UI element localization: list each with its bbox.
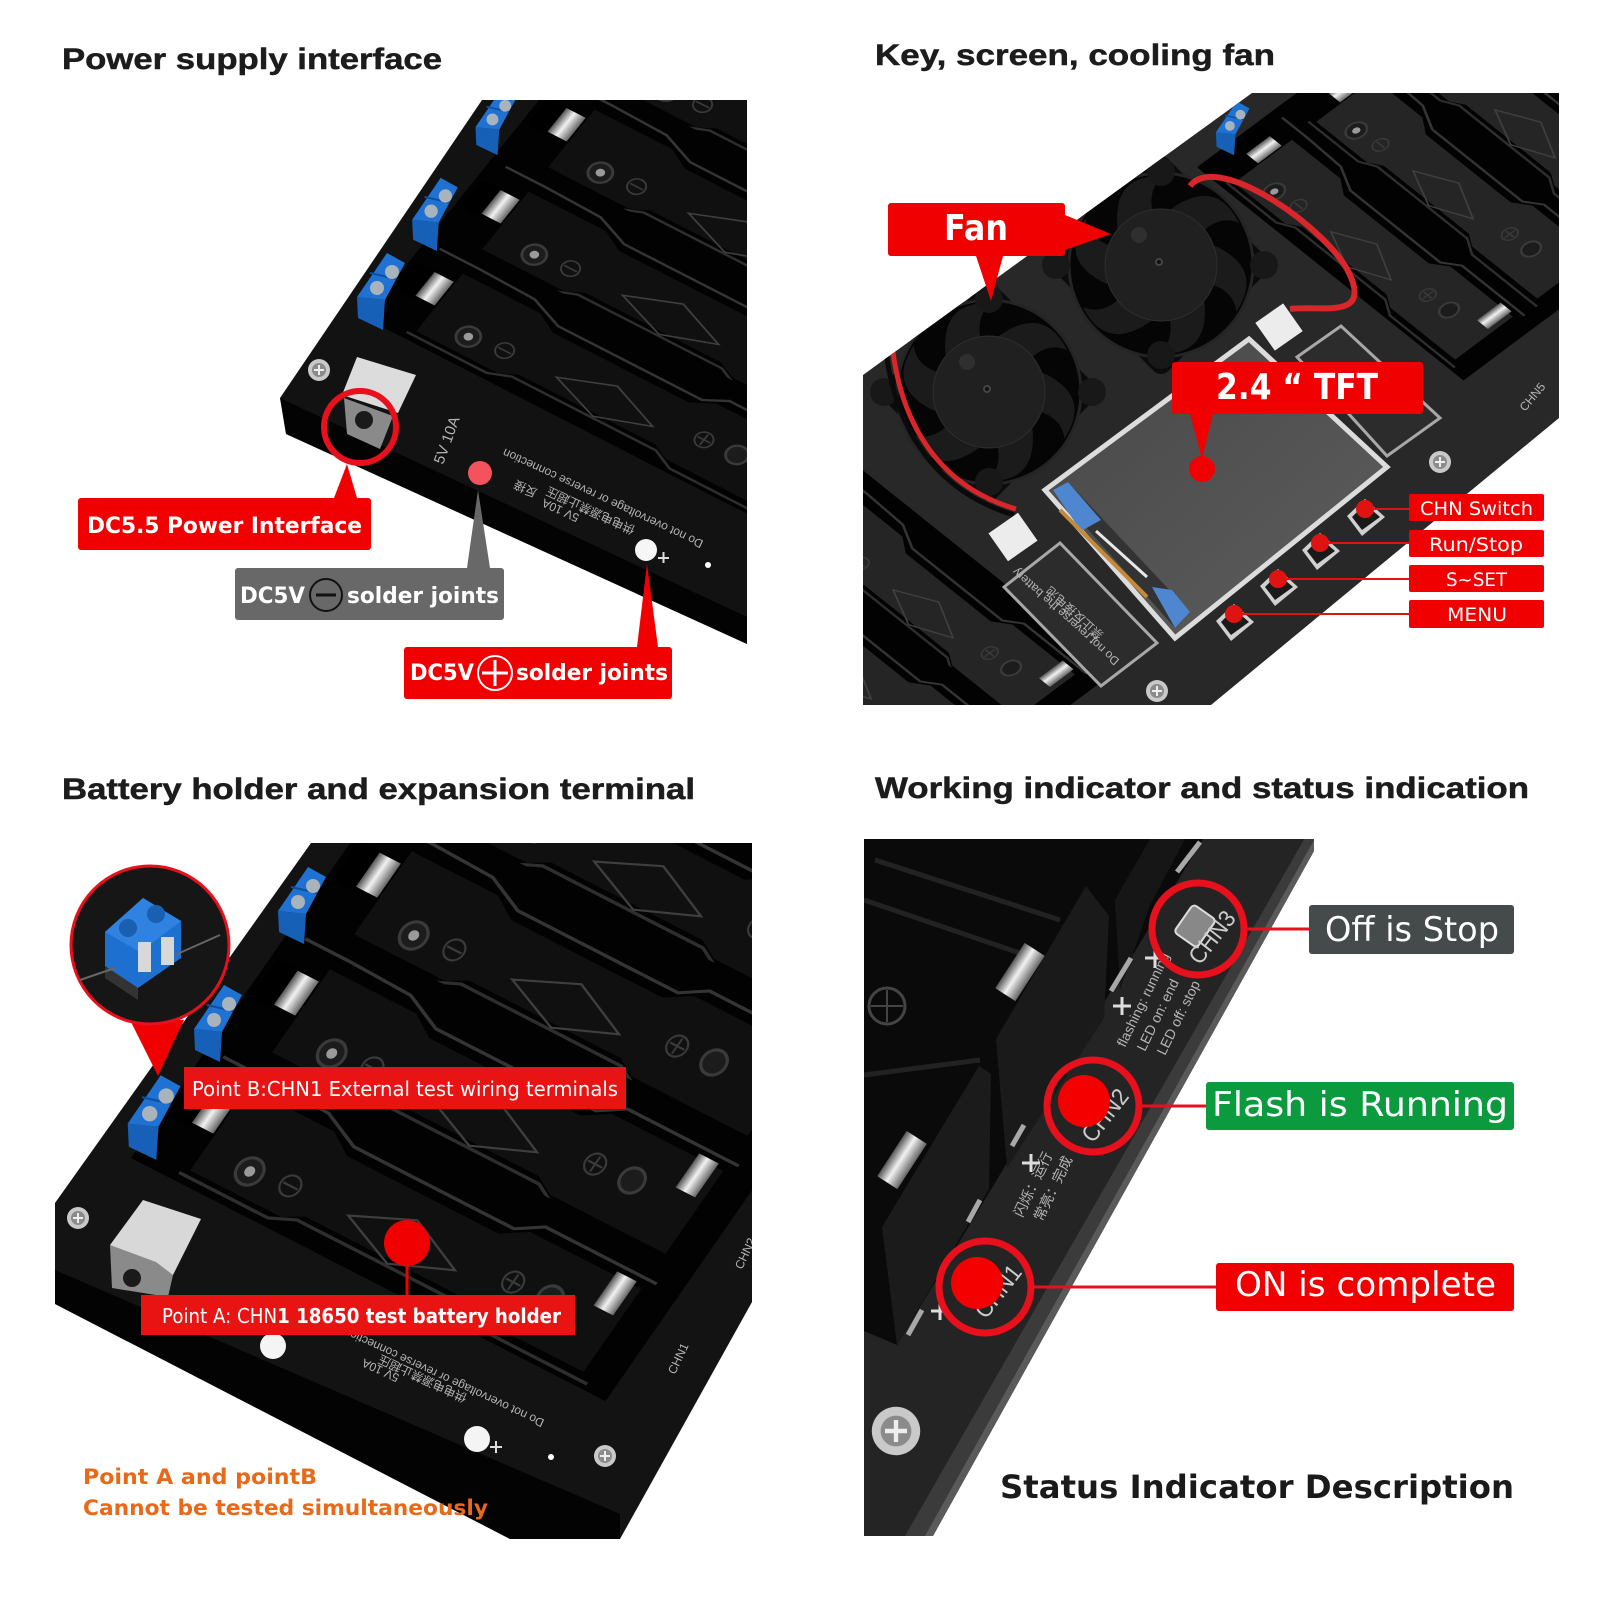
callout: DC5.5 power interface <box>78 464 371 550</box>
board photo: battery holders: 供电电源禁止超压 <box>376 1352 469 1406</box>
status label: flash is running: Flash is Running <box>1212 1085 1508 1125</box>
panel: working indicator and status indication <box>860 772 1529 1540</box>
board photo: status LEDs: LED off: stop <box>1153 978 1203 1057</box>
board photo: power supply: 5V 10A <box>540 496 581 525</box>
callout: point B terminals: Point B:CHN1 External test wiring terminals <box>192 1077 618 1101</box>
note: points A and B <box>83 1465 488 1520</box>
board photo: status LEDs: 闪烁：运行 <box>1010 1149 1055 1219</box>
note: points A and B: Cannot be tested simultaneously <box>83 1496 488 1520</box>
callout: point A battery holder <box>141 1260 575 1335</box>
callout: fan <box>888 203 1111 301</box>
board photo: keys, screen and fans: CHN5 <box>1517 380 1549 414</box>
callout: DC5V positive solder joints: DC5V <box>410 661 474 686</box>
board photo: status LEDs: flashing: running <box>1113 950 1173 1049</box>
callout: point B terminals <box>184 1067 626 1109</box>
board photo: status LEDs: 常亮：完成 <box>1030 1153 1075 1223</box>
indicator: CHN1 on ring <box>939 1241 1031 1333</box>
board photo: power supply: 反接 <box>511 477 539 501</box>
board photo: power supply: 供电电源禁止超压 <box>544 484 637 538</box>
marker: point A <box>384 1220 430 1266</box>
callout: fan: Fan <box>944 208 1008 249</box>
board photo: battery holders: CHN2 <box>732 1235 759 1271</box>
callout: point A battery holder: Point A: CHN1 18650 test battery holder <box>162 1304 561 1328</box>
callout: CHN switch: CHN Switch <box>1420 498 1533 520</box>
indicator: CHN2 flashing ring <box>1047 1060 1139 1152</box>
board photo: power supply: Do not overvoltage or reverse connection <box>500 446 705 551</box>
heading: working indicator and status indication: Working indicator and status indication <box>875 772 1529 805</box>
callout: S~SET: S~SET <box>1446 569 1507 591</box>
marker: positive solder joint <box>635 539 657 561</box>
status label: flash is running <box>1139 1082 1514 1130</box>
callout: DC5V positive solder joints <box>404 564 672 699</box>
inset: terminal close-up <box>71 866 229 1076</box>
callout: DC5V negative solder joints <box>235 490 504 620</box>
board photo: status LEDs: CHN3 <box>1183 906 1242 970</box>
callout: DC5.5 power interface: DC5.5 Power Interface <box>87 514 362 539</box>
red ring: power jack <box>324 391 396 463</box>
status label: on is complete: ON is complete <box>1235 1265 1496 1305</box>
status label: off is stop <box>1244 905 1514 954</box>
callout: run/stop: Run/Stop <box>1429 534 1523 556</box>
board photo: keys, screen and fans <box>863 93 1559 705</box>
board photo: status LEDs: CHN1 <box>969 1260 1028 1324</box>
callout: 2.4 inch TFT: 2.4 “ TFT <box>1216 367 1378 408</box>
panel: key, screen, cooling fan <box>863 43 1559 705</box>
board photo: power supply <box>280 100 747 644</box>
note: points A and B: Point A and pointB <box>83 1465 317 1489</box>
status label: off is stop: Off is Stop <box>1325 910 1499 950</box>
board photo: status LEDs <box>860 822 1320 1540</box>
callout: DC5V negative solder joints: DC5V <box>240 584 305 609</box>
board photo: battery holders: CHN1 <box>665 1340 692 1376</box>
indicator: CHN3 off ring <box>1152 883 1244 975</box>
panel: power supply interface <box>62 0 1060 699</box>
board photo: status LEDs: CHN2 <box>1076 1084 1135 1148</box>
board photo: power supply: 5V 10A <box>431 414 464 466</box>
callout: run/stop <box>1320 530 1544 557</box>
heading: power supply interface: Power supply interface <box>62 43 442 76</box>
caption: status indicator description: Status Indicator Description <box>1000 1468 1514 1506</box>
callout: menu <box>1234 600 1544 628</box>
board photo: battery holders: Do not overvoltage or reverse connection <box>341 1325 546 1430</box>
callout: DC5V negative solder joints: solder joints <box>347 584 499 609</box>
status label: on is complete <box>1031 1263 1514 1311</box>
board photo: battery holders <box>55 843 752 1539</box>
heading: battery holder and expansion terminal: Battery holder and expansion terminal <box>62 773 695 806</box>
callout: CHN switch <box>1365 494 1544 521</box>
panel: battery holder and expansion terminal <box>55 777 752 1539</box>
callout: 2.4 inch TFT <box>1172 362 1423 482</box>
marker: negative solder joint <box>468 461 492 485</box>
heading: key, screen, cooling fan: Key, screen, cooling fan <box>875 39 1275 72</box>
board photo: battery holders: 5V 10A <box>360 1356 401 1385</box>
board photo: keys, screen and fans: 禁止反接电池 <box>1042 584 1106 643</box>
callout: menu: MENU <box>1447 604 1507 626</box>
callout: DC5V positive solder joints: solder joints <box>516 661 668 686</box>
board photo: keys, screen and fans: Do not reverse the battery <box>1010 565 1122 668</box>
callout: S~SET <box>1278 565 1544 592</box>
board photo: status LEDs: LED on: end <box>1133 976 1182 1053</box>
